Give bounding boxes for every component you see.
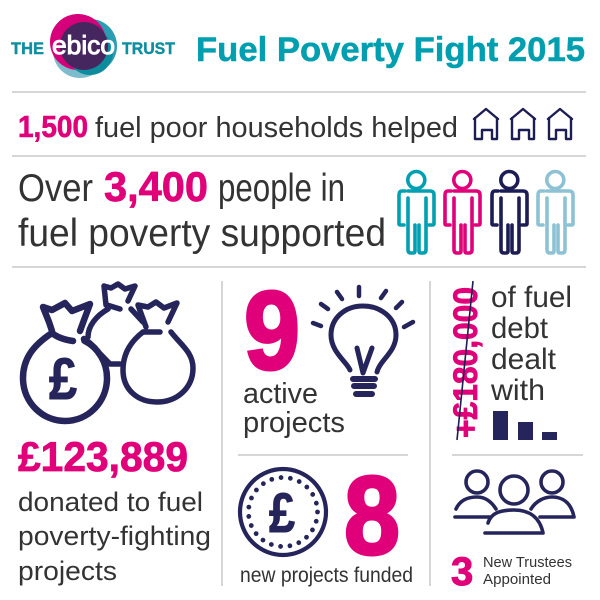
donated description: poverty-fighting xyxy=(18,521,211,551)
new projects funded text: new projects funded xyxy=(240,564,413,587)
icon: person pink xyxy=(445,172,480,253)
debt description xyxy=(490,281,572,407)
icons: three houses xyxy=(474,109,572,139)
icon: money bags xyxy=(23,284,193,421)
icon: trustees xyxy=(455,471,574,533)
debt description: dealt xyxy=(491,343,557,376)
icon: pound sign on bag: £ xyxy=(49,347,77,412)
logo: The Ebico Trust: TRUST xyxy=(122,39,176,58)
logo: The Ebico Trust xyxy=(11,14,176,78)
logo: The Ebico Trust: ebico xyxy=(52,30,115,60)
debt figure struck through: +£180,000 xyxy=(447,287,485,438)
people supported text: people in xyxy=(218,167,345,210)
number 3: 3 xyxy=(451,550,473,594)
households helped text: 1,500 xyxy=(18,109,88,144)
donated description: projects xyxy=(18,556,117,586)
title: Fuel Poverty Fight 2015 xyxy=(196,31,585,69)
icon: person teal xyxy=(399,172,434,253)
number 8: 8 xyxy=(344,454,400,578)
icon: person light blue xyxy=(538,172,573,253)
donated amount: £123,889 xyxy=(18,433,188,480)
people supported text: fuel poverty supported xyxy=(18,212,386,255)
logo: The Ebico Trust: THE xyxy=(11,39,44,58)
active projects text: active xyxy=(243,378,318,410)
number 9: 9 xyxy=(244,269,300,393)
people supported text: Over xyxy=(18,167,93,210)
people supported text xyxy=(18,163,386,255)
households helped text: fuel poor households helped xyxy=(95,112,458,144)
active projects text: projects xyxy=(243,407,345,439)
icon: person navy xyxy=(492,172,527,253)
icon: pound coin: £ xyxy=(269,481,295,544)
donated description xyxy=(18,487,211,586)
new trustees text xyxy=(483,555,572,588)
people supported text: 3,400 xyxy=(104,163,208,210)
new trustees text: New Trustees xyxy=(483,555,572,571)
debt description: with xyxy=(490,374,545,407)
debt description: of fuel xyxy=(491,281,572,314)
debt description: debt xyxy=(491,312,549,345)
new trustees text: Appointed xyxy=(483,572,551,588)
active projects text xyxy=(243,378,345,439)
icon: pound coin xyxy=(240,469,326,555)
icon: descending bars xyxy=(493,411,557,440)
donated description: donated to fuel xyxy=(18,487,203,517)
icon: light bulb xyxy=(313,287,413,394)
